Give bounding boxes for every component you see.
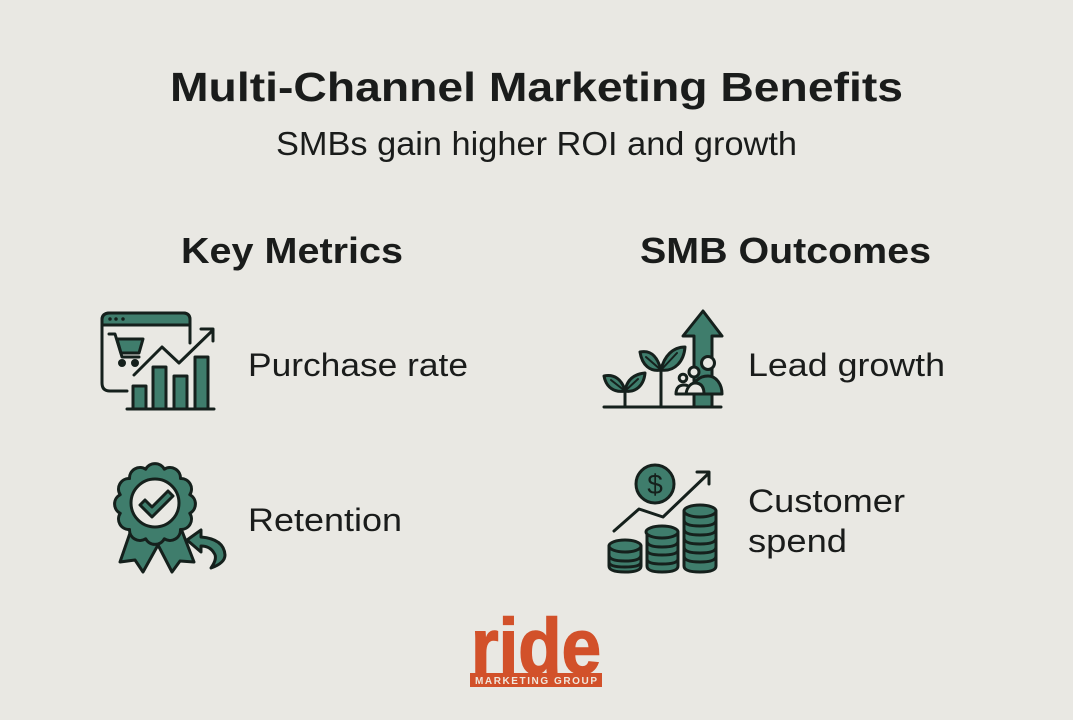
- title: Multi-Channel Marketing Benefits: [170, 64, 903, 110]
- icon: retention badge: [115, 464, 225, 572]
- logo: ride marketing group: MARKETING GROUP: [475, 676, 597, 687]
- icon: lead growth plants and arrow: [604, 311, 722, 407]
- label: customer spend: [748, 483, 905, 559]
- label: retention: Retention: [248, 502, 402, 538]
- heading: key metrics: Key Metrics: [181, 230, 403, 271]
- label: purchase rate: Purchase rate: [248, 347, 468, 383]
- heading: SMB outcomes: SMB Outcomes: [640, 230, 931, 271]
- icon: customer spend coins: $: [647, 469, 663, 500]
- icon: customer spend coins: [609, 465, 716, 572]
- subtitle: SMBs gain higher ROI and growth: [276, 125, 797, 162]
- icon: purchase rate chart: [102, 313, 214, 409]
- label: lead growth: Lead growth: [748, 347, 945, 383]
- logo: ride marketing group: ride: [471, 602, 601, 690]
- label: customer spend: spend: [748, 523, 847, 559]
- label: customer spend: Customer: [748, 483, 905, 519]
